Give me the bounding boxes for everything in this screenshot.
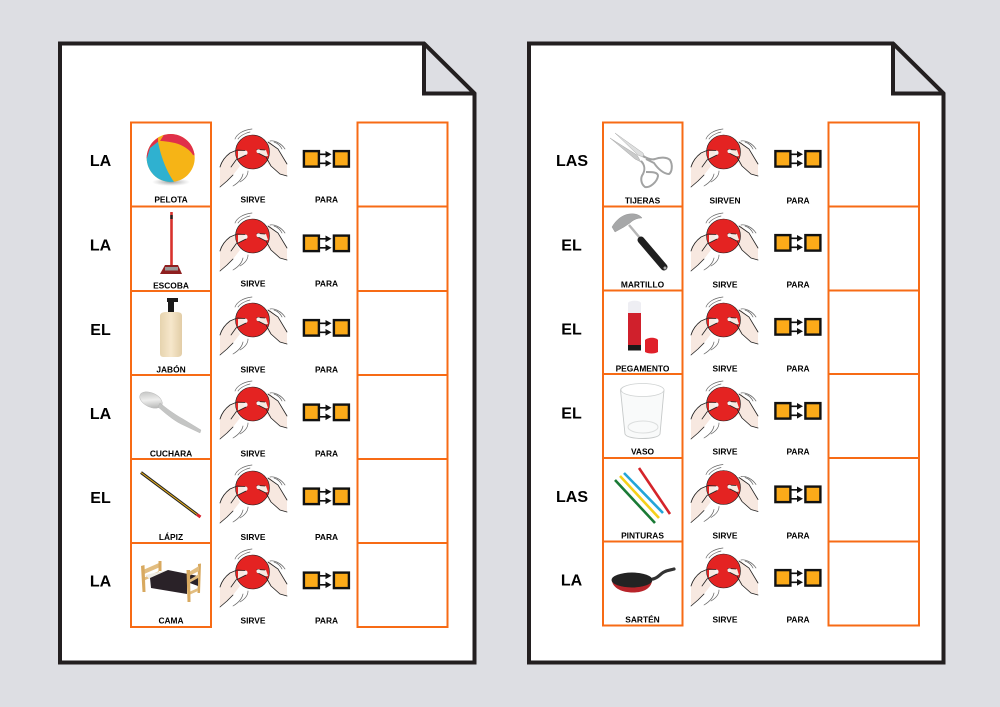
left verb and para labels: SIRVE bbox=[241, 532, 266, 542]
right articles: EL bbox=[561, 322, 582, 338]
right object names: SARTÉN bbox=[625, 614, 660, 624]
left object names: CUCHARA bbox=[150, 448, 192, 458]
left verb and para labels: PARA bbox=[315, 616, 338, 626]
right verb and para labels: PARA bbox=[786, 196, 810, 206]
right articles: LAS bbox=[556, 489, 588, 506]
left verb and para labels: PARA bbox=[315, 532, 338, 542]
right object names: TIJERAS bbox=[625, 196, 661, 206]
right verb and para labels: PARA bbox=[786, 614, 810, 624]
right articles: EL bbox=[561, 406, 582, 422]
left articles bbox=[90, 153, 112, 590]
icon: ball bbox=[146, 134, 195, 186]
right verb and para labels: SIRVE bbox=[713, 446, 738, 456]
right object names: MARTILLO bbox=[621, 280, 665, 290]
icon: bed bbox=[141, 561, 201, 602]
left verb and para labels: SIRVE bbox=[241, 448, 266, 458]
icon: frying pan bbox=[612, 569, 674, 592]
icon: broom bbox=[160, 212, 182, 274]
left verb and para labels: SIRVE bbox=[241, 278, 266, 288]
icon: glue stick bbox=[628, 301, 658, 354]
left verb and para labels: SIRVE bbox=[241, 364, 266, 374]
left object names: CAMA bbox=[158, 616, 184, 626]
left object names bbox=[150, 194, 192, 626]
left verb and para labels: SIRVE bbox=[241, 194, 266, 204]
right verb and para labels: SIRVE bbox=[713, 280, 738, 290]
left articles: EL bbox=[90, 490, 111, 507]
right verb and para labels: SIRVEN bbox=[709, 196, 741, 206]
icon: glass bbox=[620, 384, 664, 438]
left object names: JABÓN bbox=[156, 364, 186, 374]
right articles: LAS bbox=[556, 153, 588, 170]
right object names bbox=[616, 196, 670, 624]
left articles: LA bbox=[90, 574, 112, 590]
right verb and para labels: PARA bbox=[786, 446, 810, 456]
icon: scissors bbox=[610, 133, 672, 187]
right object names: PEGAMENTO bbox=[616, 364, 670, 374]
left articles: LA bbox=[90, 153, 112, 170]
icon: coloured pencils bbox=[615, 468, 670, 523]
right object column grid bbox=[603, 122, 682, 626]
left verb and para labels: SIRVE bbox=[241, 616, 266, 626]
left verb and para labels: PARA bbox=[315, 364, 338, 374]
left verb and para labels bbox=[241, 194, 338, 626]
left articles: EL bbox=[90, 322, 111, 339]
right verb and para labels: PARA bbox=[786, 530, 810, 540]
right sirve icons bbox=[691, 129, 758, 606]
right object names: PINTURAS bbox=[621, 530, 664, 540]
left answer column grid bbox=[358, 122, 448, 627]
panel: left sheet bbox=[60, 44, 474, 662]
right para icons bbox=[775, 151, 820, 586]
left articles: LA bbox=[90, 238, 112, 254]
right verb and para labels bbox=[709, 196, 810, 624]
right verb and para labels: SIRVE bbox=[713, 364, 738, 374]
icon: soap bottle bbox=[160, 298, 182, 357]
right articles bbox=[556, 153, 588, 590]
right verb and para labels: SIRVE bbox=[713, 614, 738, 624]
panel: right sheet bbox=[529, 44, 944, 662]
right verb and para labels: PARA bbox=[786, 364, 810, 374]
left object names: LÁPIZ bbox=[159, 531, 183, 542]
right verb and para labels: SIRVE bbox=[713, 530, 738, 540]
left object names: ESCOBA bbox=[153, 280, 189, 290]
left verb and para labels: PARA bbox=[315, 278, 338, 288]
right articles: LA bbox=[561, 572, 583, 590]
right object names: VASO bbox=[631, 446, 655, 456]
icon: spoon bbox=[137, 389, 201, 433]
right answer column grid bbox=[828, 122, 919, 626]
right articles: EL bbox=[561, 238, 582, 254]
left verb and para labels: PARA bbox=[315, 448, 338, 458]
left object column grid bbox=[131, 122, 211, 627]
right sheet folded corner bbox=[893, 44, 944, 94]
icon: pencil bbox=[141, 472, 200, 517]
left verb and para labels: PARA bbox=[315, 194, 338, 204]
left sirve icons bbox=[220, 129, 287, 607]
left object names: PELOTA bbox=[154, 194, 188, 204]
left sheet folded corner bbox=[424, 44, 474, 94]
icon: hammer bbox=[612, 214, 666, 270]
left para icons bbox=[304, 151, 349, 588]
left articles: LA bbox=[90, 406, 112, 423]
right verb and para labels: PARA bbox=[786, 280, 810, 290]
